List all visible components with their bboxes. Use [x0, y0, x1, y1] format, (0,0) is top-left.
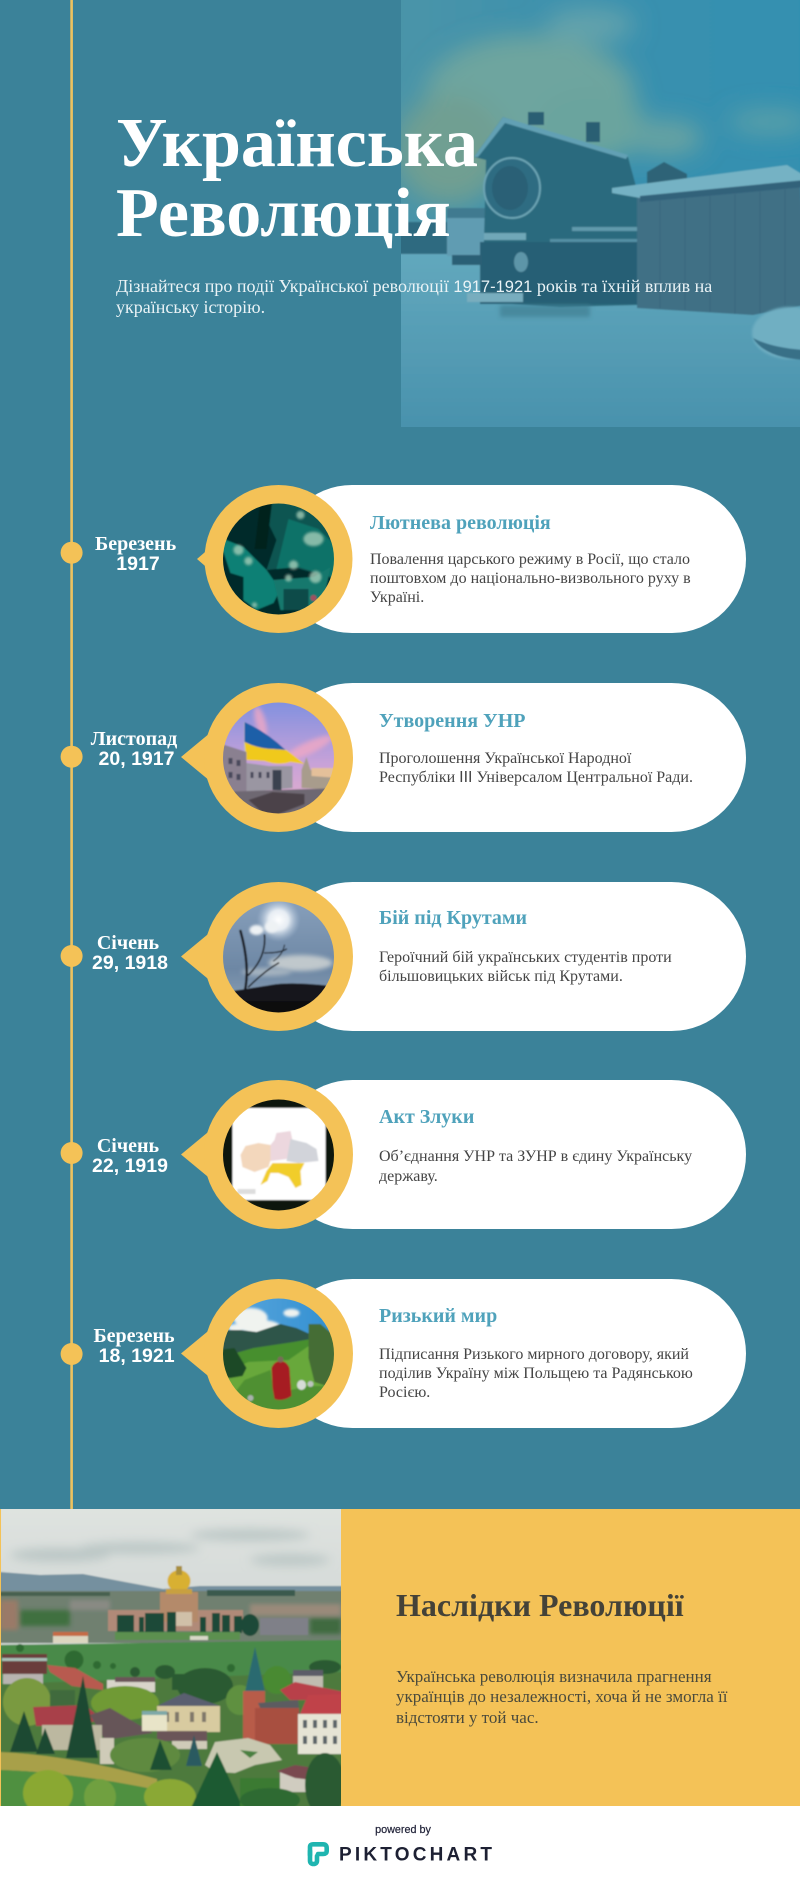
timeline item: Березень 1917: Україні.: [370, 589, 424, 606]
timeline item: Березень 1917: поштовхом до національно-визвольного руху в: [370, 570, 691, 587]
subtitle: українську історію.: [116, 297, 265, 317]
timeline item: Березень 1917: Лютнева революція: [370, 512, 551, 534]
timeline item: Березень 18, 1921: Росією.: [379, 1384, 430, 1401]
photo: bare tree under the sun: [223, 902, 334, 1012]
timeline item: Січень 29, 1918: 29, 1918: [92, 952, 168, 974]
timeline item: Листопад 20, 1917: [61, 683, 746, 832]
icon: Piktochart logo mark: [310, 1844, 327, 1864]
timeline item: Січень 29, 1918: Бій під Крутами: [379, 907, 527, 929]
timeline vertical line: [70, 0, 73, 1510]
photo: teal fabric: [223, 504, 334, 614]
timeline item: Березень 18, 1921: поділив Україну між Польщею та Радянською: [379, 1365, 693, 1382]
timeline item: Березень 1917: [61, 485, 746, 633]
timeline item: Січень 22, 1919: Січень: [97, 1135, 160, 1157]
timeline item: Березень 18, 1921: [61, 1279, 746, 1428]
footer: Piktochart wordmark: PIKTOCHART: [339, 1844, 495, 1866]
hero photo: locomotive in snow: [395, 0, 800, 432]
timeline item: Січень 29, 1918: Героїчний бій українських студентів проти: [379, 949, 672, 966]
timeline item: Листопад 20, 1917: Утворення УНР: [379, 710, 525, 732]
timeline item: Листопад 20, 1917: 20, 1917: [99, 748, 174, 770]
footer: white band: [0, 1806, 800, 1886]
timeline item: Січень 29, 1918: більшовицьких військ під Крутами.: [379, 968, 623, 985]
timeline item: Березень 18, 1921: Ризький мир: [379, 1305, 497, 1327]
subtitle: [116, 276, 712, 317]
text block: consequences: відстояти у той час.: [396, 1708, 539, 1727]
timeline item: Січень 22, 1919: Об’єднання УНР та ЗУНР в єдину Українську: [379, 1148, 692, 1165]
heading: consequences: Наслідки Революції: [396, 1587, 685, 1623]
timeline item: Січень 22, 1919: державу.: [379, 1168, 438, 1185]
timeline item: Березень 1917: Березень: [95, 533, 177, 555]
timeline item: Січень 22, 1919: 22, 1919: [92, 1155, 168, 1177]
text block: consequences: українців до незалежності, хоча й не змогла її: [396, 1687, 728, 1706]
timeline item: Січень 22, 1919: [61, 1080, 746, 1229]
text block: consequences: Українська революція визначила прагнення: [396, 1667, 712, 1686]
panel: consequences background: [0, 1509, 800, 1806]
subtitle: Дізнайтеся про події Української революції 1917-1921 років та їхній вплив на: [116, 276, 712, 296]
timeline item: Березень 18, 1921: 18, 1921: [99, 1345, 175, 1367]
photo: green mountains and red figure: [223, 1298, 334, 1410]
timeline item: Листопад 20, 1917: Листопад: [91, 728, 177, 750]
photo: aerial city with golden dome: [0, 1505, 345, 1817]
timeline item: Січень 29, 1918: Січень: [97, 932, 160, 954]
timeline item: Листопад 20, 1917: Республіки III Універсалом Центральної Ради.: [379, 769, 693, 786]
title: [116, 105, 478, 252]
timeline item: Березень 18, 1921: Підписання Ризького мирного договору, який: [379, 1346, 689, 1363]
title: Українська: [116, 105, 478, 182]
timeline item: Березень 1917: Повалення царського режиму в Росії, що стало: [370, 551, 690, 568]
title: Революція: [116, 175, 451, 252]
photo: map of Ukraine: [223, 1100, 334, 1210]
photo: Ukrainian flag: [223, 702, 334, 814]
text block: consequences: [396, 1667, 728, 1727]
footer: powered by: powered by: [375, 1824, 432, 1836]
timeline item: Березень 18, 1921: Березень: [93, 1325, 175, 1347]
timeline item: Листопад 20, 1917: Проголошення Української Народної: [379, 750, 632, 767]
timeline item: Березень 1917: 1917: [116, 553, 160, 575]
timeline item: Січень 22, 1919: Акт Злуки: [379, 1106, 474, 1128]
timeline item: Січень 29, 1918: [61, 882, 746, 1031]
